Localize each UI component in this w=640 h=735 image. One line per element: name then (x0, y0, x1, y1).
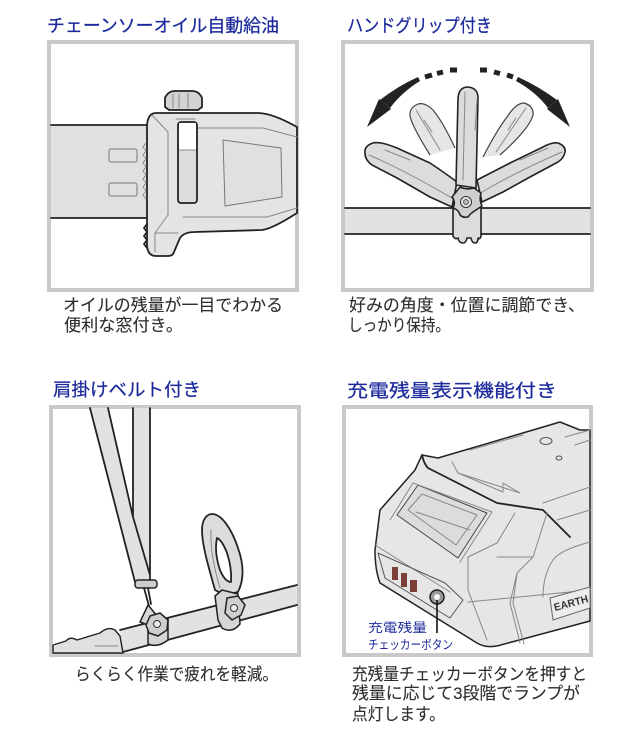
panel: shoulder belt (51, 380, 299, 684)
heading: chainsaw oil: チェーンソーオイル自動給油 (47, 16, 279, 36)
callout: button label (368, 621, 453, 652)
pole (345, 208, 590, 234)
panel: charge indicator (344, 381, 591, 724)
panel: chainsaw oil (47, 16, 297, 335)
center grip (456, 87, 478, 188)
caption: grip (348, 296, 585, 335)
heading: charge indicator: 充電残量表示機能付き (347, 381, 557, 401)
latch pocket (397, 485, 487, 558)
clamp (453, 205, 481, 243)
caption: battery: 充残量チェッカーボタンを押すと (352, 665, 587, 684)
lamps (392, 567, 417, 592)
heading: hand grip: ハンドグリップ付き (347, 16, 492, 36)
panel: hand grip (343, 16, 592, 335)
callout: button label: 充電残量 (368, 621, 427, 635)
battery details: EARTH (553, 593, 590, 614)
caption: battery (352, 665, 587, 724)
battery body (375, 422, 590, 647)
caption: oil window: 便利な窓付き。 (64, 316, 183, 335)
clamp 1 (140, 605, 168, 645)
faded grips (410, 103, 533, 157)
caption: grip: 好みの角度・位置に調節でき、 (349, 296, 585, 315)
left grip (365, 143, 457, 207)
caption: belt: らくらく作業で疲れを軽減。 (75, 665, 278, 684)
ring handle (202, 514, 242, 594)
image frame: oil window (49, 42, 297, 290)
callout: button label: チェッカーボタン (368, 638, 453, 652)
icon: knob (452, 187, 482, 217)
top marks (540, 438, 552, 444)
belt straps (90, 408, 150, 582)
oil tank body (147, 113, 297, 256)
oil window (178, 122, 197, 203)
checker button (430, 590, 444, 604)
caption: battery: 残量に応じて3段階でランプが (352, 684, 580, 703)
image frame: grip (343, 42, 592, 290)
name plate (550, 587, 590, 620)
battery details (375, 430, 590, 644)
caption: battery: 点灯します。 (352, 705, 445, 724)
arrow: right (480, 70, 570, 127)
lower panel (378, 553, 463, 618)
icon: knob (165, 91, 202, 110)
image frame: belt (51, 407, 299, 655)
caption: grip: しっかり保持。 (348, 316, 450, 335)
right grip (477, 143, 565, 202)
buckle (135, 580, 157, 588)
image frame: battery (344, 407, 591, 655)
heading: shoulder belt: 肩掛けベルト付き (53, 380, 201, 400)
clamp 2 (215, 590, 245, 630)
caption: oil window (63, 296, 283, 335)
caption: oil window: オイルの残量が一目でわかる (63, 296, 283, 315)
pole (53, 585, 297, 653)
arrow: left (367, 70, 457, 127)
